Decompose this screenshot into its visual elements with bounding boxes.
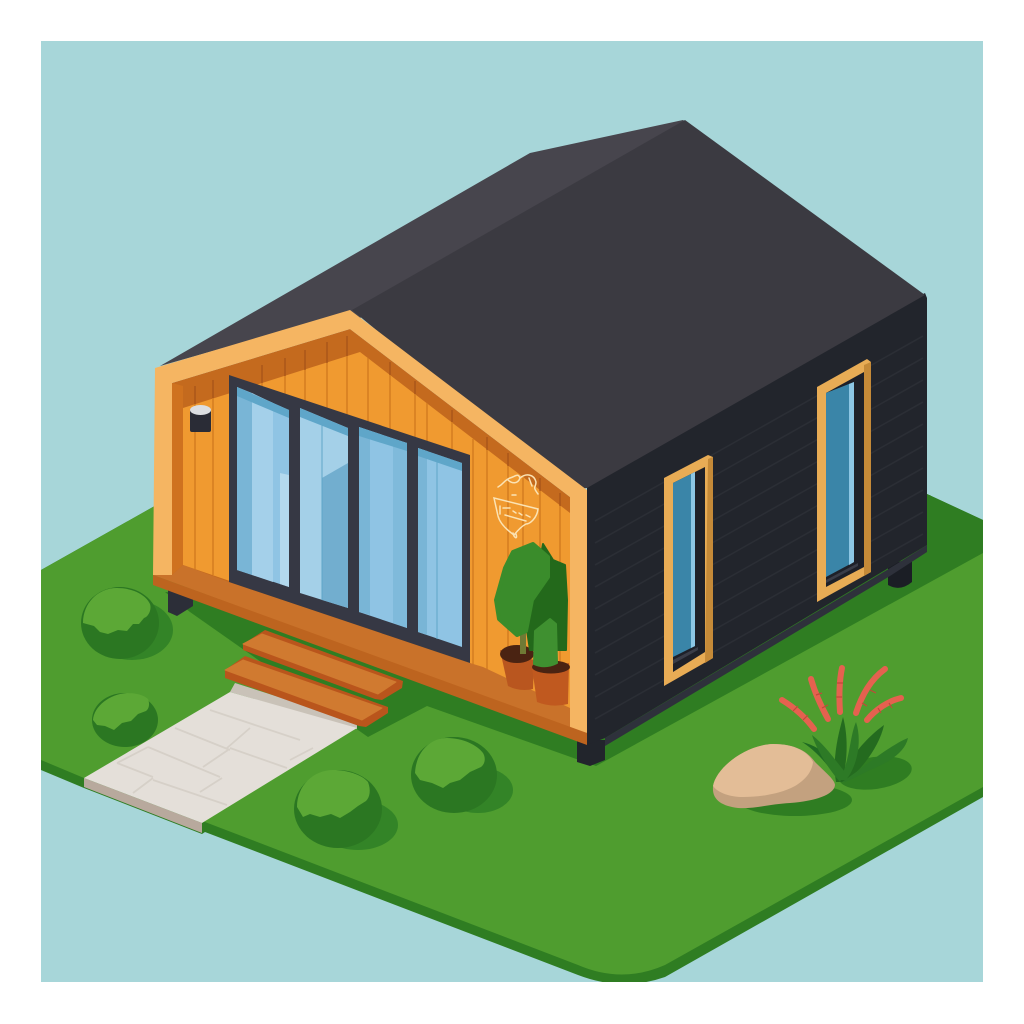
rock shadow: [738, 784, 852, 816]
lawn shadow from house: [165, 494, 983, 766]
roof: left lit slope: [160, 120, 690, 366]
roof: [160, 120, 925, 490]
side window: left: [664, 455, 713, 686]
porch side face: [172, 383, 183, 575]
pot 2: [532, 660, 570, 706]
shrub 4: [411, 737, 513, 813]
stone path: [84, 683, 357, 833]
tree 1 stem: [520, 630, 526, 654]
glass pane 3: [359, 427, 407, 628]
house legs: [168, 558, 912, 766]
right side wall: [587, 293, 927, 746]
tree foliage light: [496, 544, 548, 635]
front gable porch: [153, 310, 587, 745]
sliding glass door: [229, 375, 470, 663]
potted plants: [496, 544, 570, 706]
deck lip: [153, 575, 587, 745]
leaves: [802, 717, 908, 782]
glass pane 1: [237, 387, 289, 587]
glass pane 4: [418, 448, 462, 647]
spike ticks: [793, 683, 892, 720]
shrub 1: [81, 587, 173, 660]
red-spiked plant: [782, 668, 908, 782]
red spikes: [782, 668, 901, 729]
shrub 2: [92, 693, 158, 747]
upper step: [243, 630, 403, 700]
side window: right: [817, 359, 871, 602]
pot 1: [500, 645, 534, 690]
lawn base: [41, 494, 983, 984]
glass pane 2: [300, 408, 348, 608]
porch interior soffit: [172, 329, 570, 732]
roof: main slope: [352, 120, 925, 490]
small shrub: [534, 619, 557, 666]
plant shadow: [836, 752, 914, 794]
lower step: [225, 656, 388, 727]
wall lamp: [190, 405, 211, 432]
gable frame: [153, 310, 587, 733]
back wall boards: [183, 352, 570, 710]
steps: [225, 630, 403, 727]
wall ornament: [494, 475, 538, 538]
board lines: [195, 356, 560, 708]
rock: [713, 744, 835, 808]
tree foliage dark: [527, 544, 567, 650]
shrub 3: [294, 770, 398, 850]
deck surface: [153, 565, 587, 735]
